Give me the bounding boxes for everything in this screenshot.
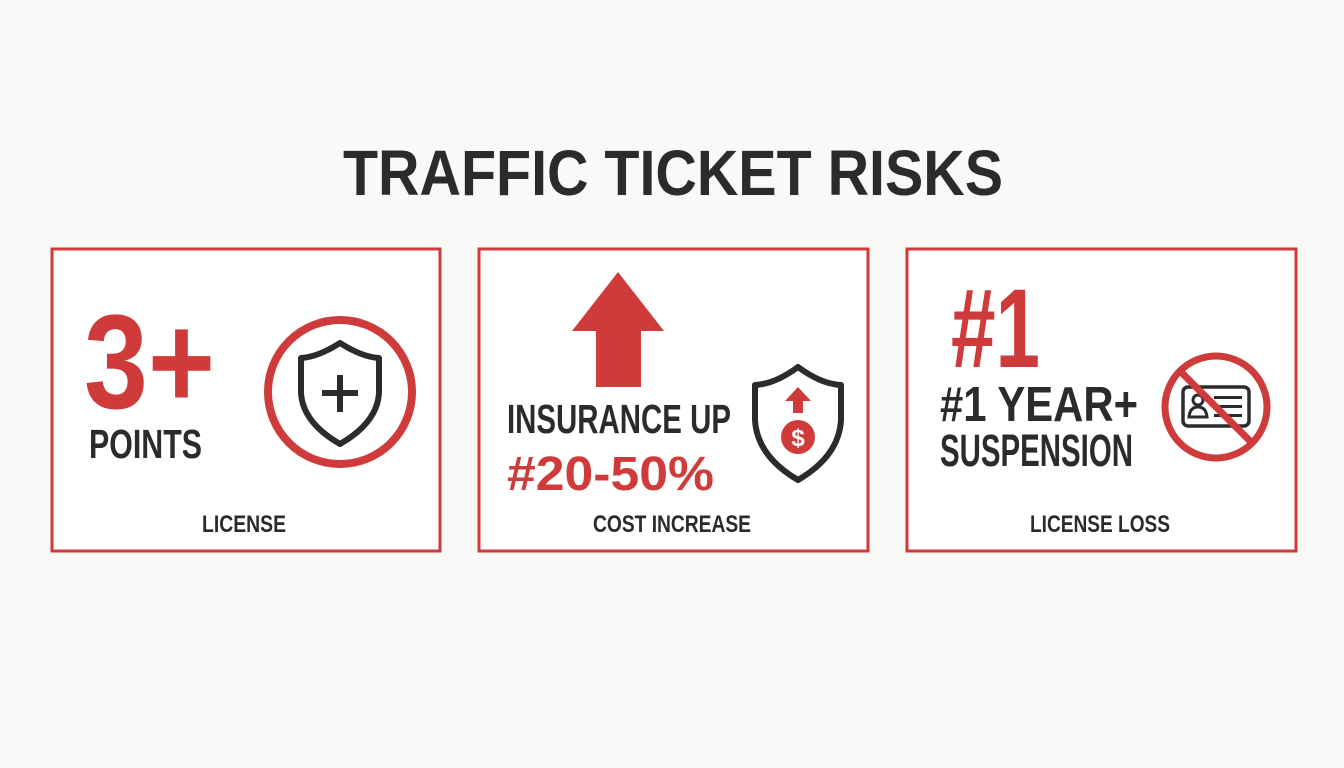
caption: license: LICENSE (202, 511, 286, 538)
title: TRAFFIC TICKET RISKS (343, 137, 1003, 209)
icon: no license (1165, 356, 1267, 458)
icon: shield with dollar: $ (791, 425, 805, 452)
arrow: up (572, 272, 664, 387)
text: percentage: #20-50% (507, 448, 714, 501)
panel: insurance (479, 249, 868, 551)
caption: cost increase: COST INCREASE (593, 511, 751, 538)
icon: shield with plus in circle (268, 320, 412, 464)
caption: license loss: LICENSE LOSS (1030, 511, 1170, 538)
big number 3+: 3+ (84, 288, 215, 437)
icon: shield with dollar (755, 367, 841, 480)
panel: license loss (907, 249, 1296, 551)
panel: points (52, 249, 440, 551)
text: suspension: SUSPENSION (940, 425, 1133, 476)
text: year suspension: #1 YEAR+ (940, 378, 1138, 432)
label: points: POINTS (89, 421, 202, 467)
big number #1: #1 (951, 266, 1040, 391)
text: insurance up: INSURANCE UP (507, 396, 731, 442)
